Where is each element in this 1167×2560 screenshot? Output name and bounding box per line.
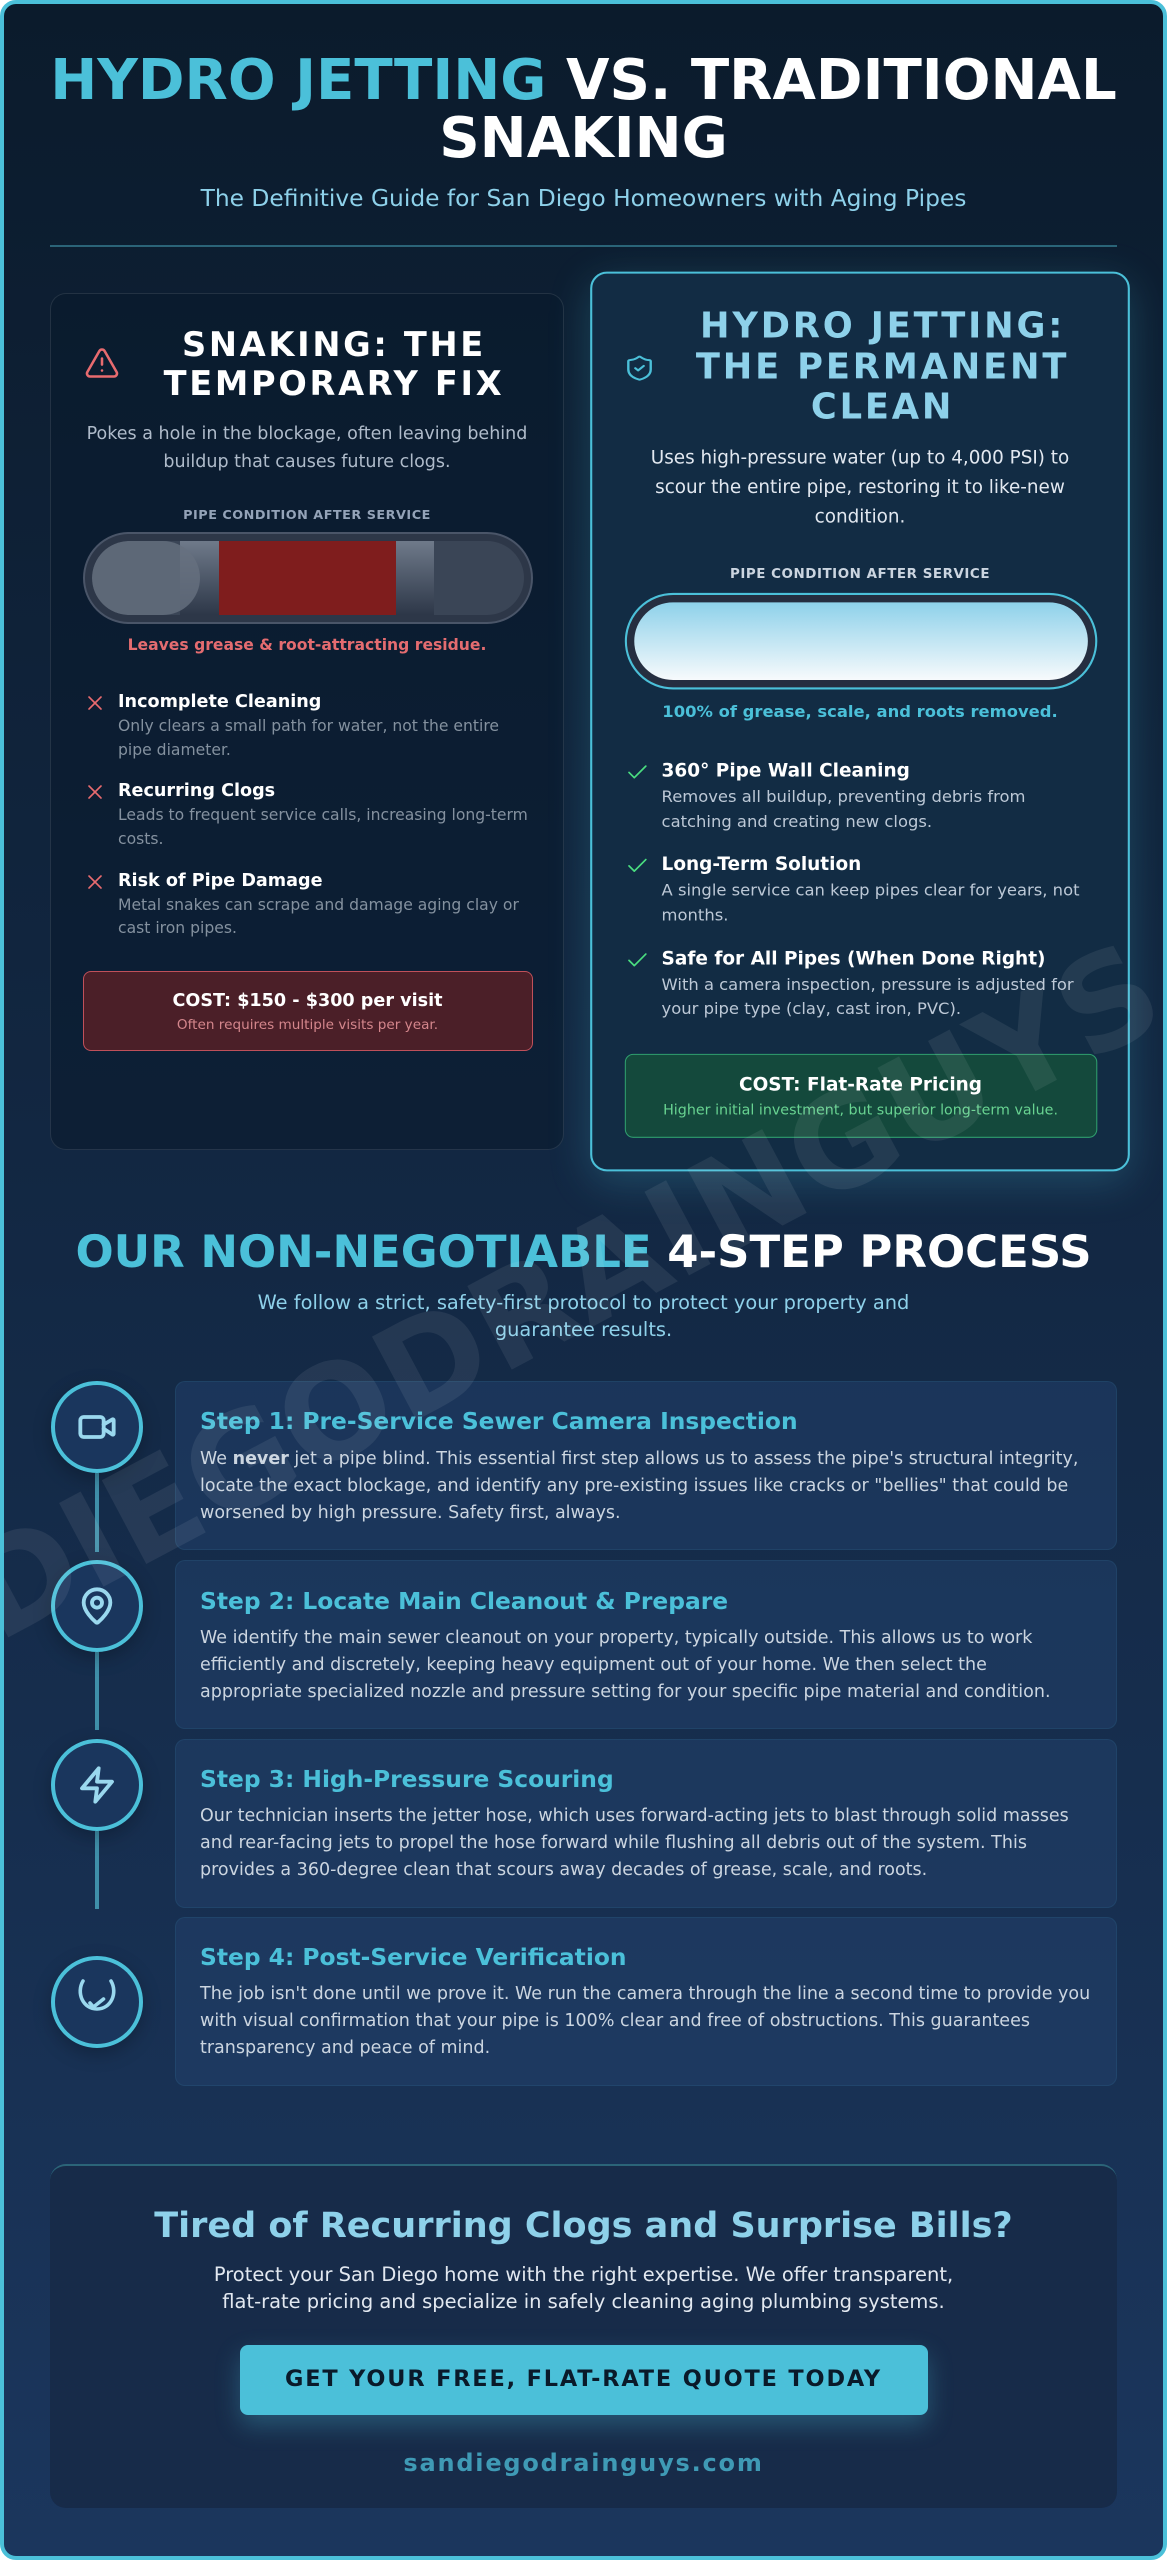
subtitle: The Definitive Guide for San Diego Homeowners with Aging Pipes: [201, 184, 966, 212]
item: recurring clogs: costs.: [118, 830, 163, 848]
item: incomplete cleaning: [88, 692, 499, 759]
step 2 card: [175, 1560, 1117, 1729]
website url: sandiegodrainguys.com: [403, 2449, 764, 2477]
timeline connector 3: [95, 1831, 99, 1909]
heading: snaking: TEMPORARY FIX: [164, 364, 504, 403]
step 4 text: [200, 1984, 1090, 2058]
item: recurring clogs: Recurring Clogs: [118, 781, 275, 801]
icon: step 4 verified check: [51, 1956, 143, 2048]
item: safe: Safe for All Pipes (When Done Right): [661, 948, 1045, 969]
item: incomplete cleaning: Only clears a small path for water, not the entire: [118, 717, 499, 735]
title: HYDRO JETTING VS. TRADITIONAL: [50, 48, 1117, 113]
list: drawbacks: [88, 692, 528, 937]
cost box: snaking: COST: $150 - $300 per visit: [172, 991, 443, 1011]
pipe label: PIPE CONDITION AFTER SERVICE: [183, 508, 431, 522]
step 4 title: Step 4: Post-Service Verification: [200, 1943, 627, 1971]
timeline connector 2: [95, 1652, 99, 1730]
item: incomplete cleaning: pipe diameter.: [118, 741, 231, 759]
step 1 title: Step 1: Pre-Service Sewer Camera Inspection: [200, 1407, 798, 1435]
item: pipe damage: Risk of Pipe Damage: [118, 871, 323, 891]
item: wall cleaning: Removes all buildup, preventing debris from: [661, 787, 1025, 806]
step 4 text: The job isn't done until we prove it. We run the camera through the line a second time to provide you: [200, 1984, 1090, 2004]
cost box: snaking: [83, 971, 533, 1051]
icon: step 2 map pin: [51, 1560, 143, 1652]
heading: hydro jetting: CLEAN: [810, 386, 954, 427]
item: wall cleaning: 360° Pipe Wall Cleaning: [661, 761, 909, 782]
heading: snaking: SNAKING: THE: [182, 325, 486, 364]
cta button: [240, 2345, 928, 2415]
heading: snaking: [164, 325, 504, 403]
step 4 card: [175, 1917, 1117, 2086]
item: safe: [628, 948, 1074, 1018]
item: long-term: months.: [661, 906, 728, 925]
title: [50, 48, 1117, 171]
pipe caption: 100% of grease, scale, and roots removed.: [662, 702, 1057, 721]
description: Uses high-pressure water (up to 4,000 PSI) to: [650, 448, 1069, 469]
cost box: hydro jetting: Higher initial investment, but superior long-term value.: [663, 1102, 1057, 1119]
item: recurring clogs: Leads to frequent service calls, increasing long-term: [118, 806, 528, 824]
description: Pokes a hole in the blockage, often leaving behind: [87, 424, 527, 444]
step 3 card: [175, 1739, 1117, 1908]
item: pipe damage: [88, 871, 519, 937]
heading: hydro jetting: HYDRO JETTING:: [700, 305, 1065, 346]
description: [650, 448, 1069, 528]
panel: hydro jetting: [590, 272, 1129, 1171]
cta text: Protect your San Diego home with the right expertise. We offer transparent,: [214, 2262, 953, 2286]
cta heading: Tired of Recurring Clogs and Surprise Bills?: [154, 2206, 1013, 2246]
item: incomplete cleaning: Incomplete Cleaning: [118, 692, 321, 712]
cta button: GET YOUR FREE, FLAT-RATE QUOTE TODAY: [285, 2366, 882, 2392]
step 3 title: Step 3: High-Pressure Scouring: [200, 1765, 614, 1793]
section heading: process: OUR NON-NEGOTIABLE 4-STEP PROCESS: [75, 1225, 1092, 1278]
step 2 text: [200, 1628, 1051, 1702]
list: benefits: [628, 761, 1080, 1018]
title: SNAKING: [439, 106, 728, 171]
description: buildup that causes future clogs.: [163, 452, 451, 472]
section subheading: guarantee results.: [495, 1318, 672, 1341]
pipe label: PIPE CONDITION AFTER SERVICE: [729, 567, 990, 582]
step 4 text: with visual confirmation that your pipe is 100% clear and free of obstructions. This guarantees: [200, 2011, 1030, 2031]
cost box: hydro jetting: COST: Flat-Rate Pricing: [739, 1075, 982, 1096]
step 2 title: Step 2: Locate Main Cleanout & Prepare: [200, 1586, 728, 1614]
step 4 text: transparency and peace of mind.: [200, 2038, 490, 2058]
icon: warning triangle: [86, 348, 118, 378]
pipe caption: Leaves grease & root-attracting residue.: [128, 636, 486, 654]
icon: step 1 camera: [51, 1381, 143, 1473]
panel: snaking: [50, 293, 564, 1150]
item: long-term: [628, 855, 1080, 925]
step 1 text: [200, 1448, 1078, 1523]
description: condition.: [814, 507, 905, 528]
cta text: [214, 2262, 953, 2313]
description: [87, 424, 527, 472]
icon: shield check: [627, 356, 652, 381]
step 3 text: and rear-facing jets to propel the hose forward while flushing all debris out of the system. This: [200, 1833, 1027, 1853]
pipe diagram: partially cleaned: [83, 532, 533, 624]
step 2 text: We identify the main sewer cleanout on your property, typically outside. This allows us to work: [200, 1628, 1032, 1648]
cost box: hydro jetting: [624, 1054, 1097, 1138]
item: long-term: A single service can keep pipes clear for years, not: [661, 881, 1079, 900]
item: safe: your pipe type (clay, cast iron, PVC).: [661, 999, 961, 1018]
cost box: snaking: Often requires multiple visits per year.: [177, 1017, 438, 1033]
item: pipe damage: Metal snakes can scrape and damage aging clay or: [118, 896, 519, 914]
step 1 text: worsened by high pressure. Safety first, always.: [200, 1503, 621, 1523]
item: safe: With a camera inspection, pressure is adjusted for: [661, 975, 1073, 994]
item: wall cleaning: [628, 761, 1025, 831]
item: wall cleaning: catching and creating new clogs.: [661, 812, 932, 831]
timeline connector 1: [95, 1473, 99, 1552]
step 1 text: locate the exact blockage, and identify any pre-existing issues like cracks or "bellies" that could be: [200, 1476, 1068, 1496]
description: scour the entire pipe, restoring it to like-new: [655, 478, 1064, 499]
pipe diagram: fully cleaned: [624, 593, 1097, 689]
panel: call to action: [50, 2164, 1117, 2508]
icon: step 3 lightning bolt: [51, 1739, 143, 1831]
step 1 card: [175, 1381, 1117, 1550]
step 3 text: Our technician inserts the jetter hose, which uses forward-acting jets to blast through solid masses: [200, 1806, 1069, 1826]
section subheading: [258, 1290, 909, 1341]
item: long-term: Long-Term Solution: [661, 855, 861, 876]
section subheading: We follow a strict, safety-first protocol to protect your property and: [258, 1290, 909, 1314]
item: recurring clogs: [88, 781, 528, 848]
step 2 text: appropriate specialized nozzle and pressure setting for your specific pipe material and condition.: [200, 1682, 1051, 1702]
step 2 text: efficiently and discretely, keeping heavy equipment out of your home. We then select the: [200, 1655, 987, 1675]
step 3 text: [200, 1806, 1069, 1880]
cta text: flat-rate pricing and specialize in safely cleaning aging plumbing systems.: [222, 2290, 945, 2313]
heading: hydro jetting: THE PERMANENT: [695, 346, 1069, 387]
step 3 text: provides a 360-degree clean that scours away decades of grease, scale, and roots.: [200, 1860, 927, 1880]
heading: hydro jetting: [695, 305, 1069, 427]
item: pipe damage: cast iron pipes.: [118, 919, 237, 937]
step 1 text: We never jet a pipe blind. This essential first step allows us to assess the pipe's structural integrity,: [200, 1448, 1078, 1468]
